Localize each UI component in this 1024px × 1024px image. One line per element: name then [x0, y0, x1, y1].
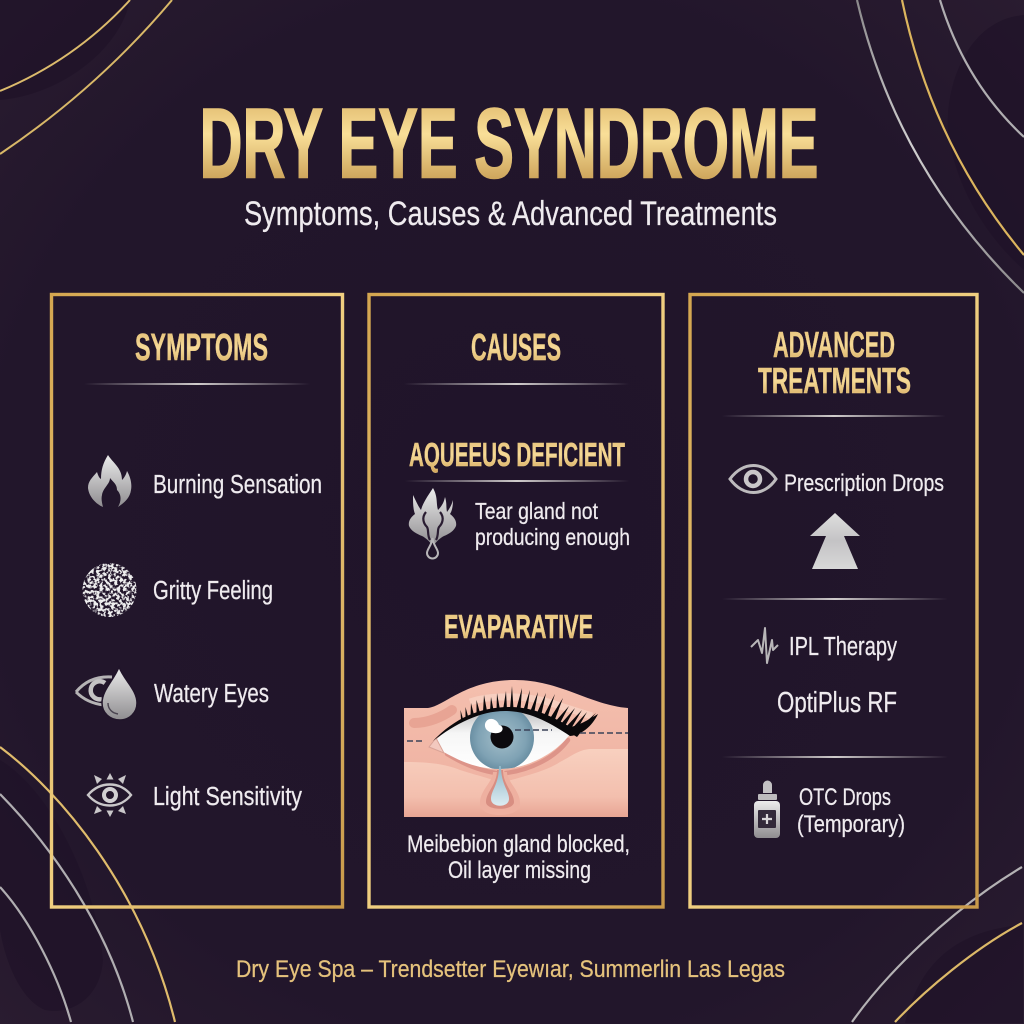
causes frame: [369, 294, 663, 907]
meibomian gland text: [407, 831, 630, 884]
icon: gritty particles: [82, 563, 136, 617]
panel: advanced treatments: [690, 294, 977, 907]
tear gland text: producing enough: [475, 524, 630, 550]
icon: eye with light rays: [88, 773, 131, 817]
burning sensation label: Burning Sensation: [153, 471, 322, 499]
treatments frame: [690, 294, 977, 907]
ipl therapy label: IPL Therapy: [789, 633, 897, 661]
treatments heading: ADVANCED: [773, 324, 895, 365]
causes heading: CAUSES: [471, 327, 561, 369]
otc drops text: (Temporary): [797, 811, 905, 838]
tear gland text: [475, 498, 630, 550]
otc drops text: [797, 784, 905, 838]
watery eyes label: Watery Eyes: [154, 680, 269, 708]
icon: eye drop bottle: [754, 780, 780, 838]
tear gland text: Tear gland not: [475, 498, 598, 524]
aqueous deficient heading: AQUEEUS DEFICIENT: [409, 436, 625, 473]
panel: symptoms: [52, 294, 342, 907]
gritty feeling label: Gritty Feeling: [153, 577, 273, 605]
meibomian gland text: Meibebion gland blocked,: [407, 831, 630, 858]
subtitle: Symptoms, Causes & Advanced Treatments: [244, 195, 777, 233]
symptoms frame: [52, 294, 342, 907]
icon: eye: [730, 466, 776, 492]
icon: eye with tear drop: [76, 667, 137, 720]
footer: Dry Eye Spa – Trendsetter Eyewıar, Summerlin Las Legas: [236, 956, 785, 983]
optiplus rf label: OptiPlus RF: [777, 687, 897, 719]
evaporative heading: EVAPARATIVE: [444, 608, 593, 645]
treatments heading: [758, 324, 911, 401]
light sensitivity label: Light Sensitivity: [153, 783, 302, 811]
icon: pulse wave: [751, 628, 778, 663]
prescription drops label: Prescription Drops: [784, 470, 944, 497]
panel: causes: [369, 294, 663, 907]
symptoms heading: SYMPTOMS: [135, 327, 268, 369]
otc drops text: OTC Drops: [799, 784, 891, 811]
illustration: eye with tear: [404, 680, 628, 817]
arrow up: [810, 513, 860, 569]
icon: flame: [88, 455, 131, 507]
treatments heading: TREATMENTS: [758, 360, 911, 401]
icon: tear gland: [409, 488, 456, 558]
meibomian gland text: Oil layer missing: [448, 857, 591, 884]
